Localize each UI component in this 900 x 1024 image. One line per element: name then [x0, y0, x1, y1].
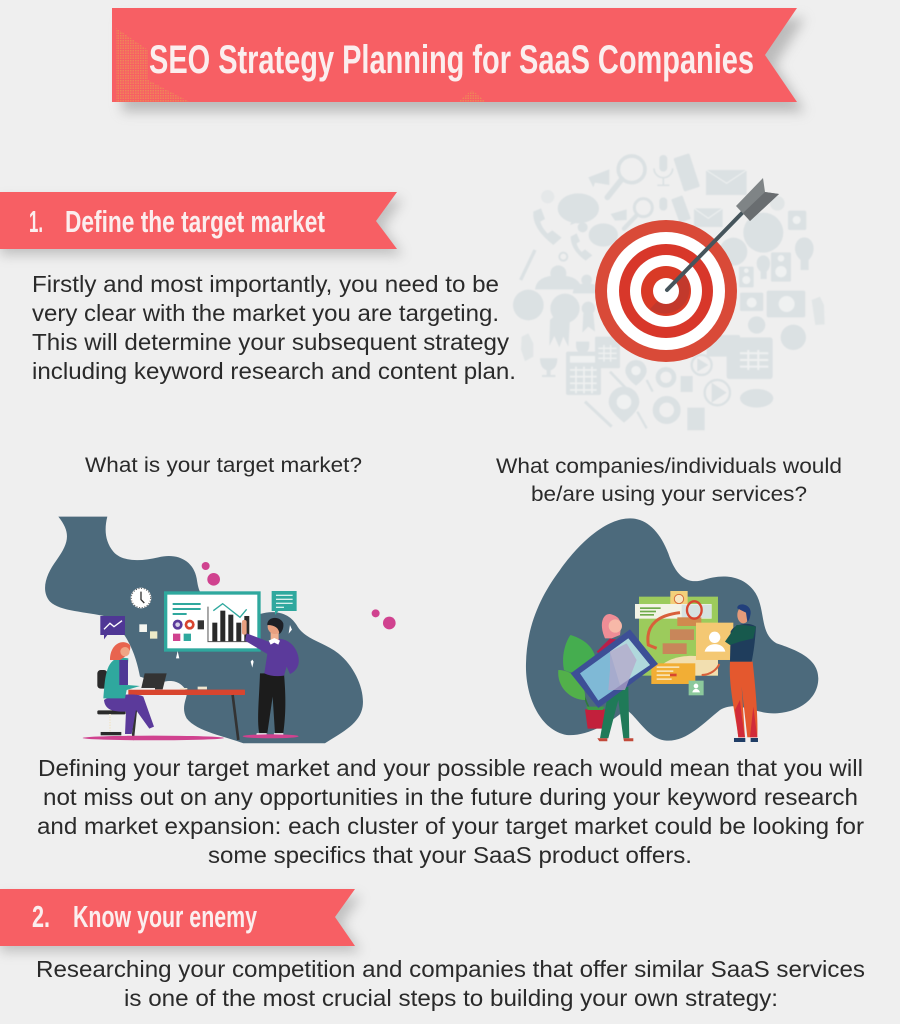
target with arrow	[595, 178, 779, 362]
section 1 closing paragraph: and market expansion: each cluster of your target market could be looking for	[37, 813, 864, 839]
section 2 intro text	[36, 956, 865, 1011]
woman holding phone	[571, 614, 658, 741]
floor shadows	[83, 734, 299, 740]
chart board	[166, 593, 259, 650]
dark blob	[45, 517, 363, 743]
target rings	[595, 220, 737, 362]
question: target market: What is your target market?	[85, 453, 362, 477]
dart arrow	[667, 178, 779, 290]
question: companies and individuals: What companies/individuals would	[496, 454, 842, 478]
question: companies and individuals	[496, 454, 842, 506]
section 1 heading: 1.	[29, 204, 43, 239]
desk	[128, 687, 245, 740]
illustration: team reviewing chart	[45, 517, 396, 743]
icon cloud behind target	[513, 153, 825, 430]
section 1 heading: Define the target market	[65, 204, 325, 239]
section 2 heading: 2.	[32, 899, 50, 934]
sticky notes	[139, 624, 157, 639]
section 1 intro text: very clear with the market you are targeting.	[32, 300, 499, 326]
tilted phone	[571, 629, 658, 708]
small green profile card	[689, 681, 704, 695]
section 1 intro text: including keyword research and content plan.	[32, 358, 516, 384]
section 1 intro text: Firstly and most importantly, you need to be	[32, 271, 499, 297]
section 1 intro text: This will determine your subsequent strategy	[32, 329, 510, 355]
clock	[131, 588, 151, 608]
question: companies and individuals: be/are using your services?	[531, 482, 807, 506]
section 1 closing paragraph: Defining your target market and your possible reach would mean that you will	[38, 755, 863, 781]
section 2 heading: Know your enemy	[73, 899, 258, 934]
section 1 ribbon	[0, 192, 403, 255]
section 1 closing paragraph: some specifics that your SaaS product offers.	[208, 842, 692, 868]
presenter man	[242, 618, 299, 738]
dark blob right	[526, 518, 818, 741]
section 1 heading	[29, 204, 325, 239]
section 1 closing paragraph: not miss out on any opportunities in the future during your keyword research	[43, 784, 858, 810]
title ribbon	[112, 8, 805, 112]
orange profile card	[696, 623, 733, 660]
plant	[558, 635, 605, 729]
orange message card	[651, 663, 695, 684]
seated woman	[97, 642, 160, 738]
illustration: phone and user profiles	[526, 518, 818, 742]
pink dots right	[372, 609, 396, 629]
icon: large magnifier	[607, 156, 645, 197]
green document panel	[635, 591, 718, 676]
section 2 heading	[32, 899, 258, 934]
section 2 ribbon	[0, 889, 361, 952]
section 2 intro text: is one of the most crucial steps to building your own strategy:	[124, 985, 778, 1011]
section 1 intro text	[32, 271, 516, 384]
thinking man	[725, 604, 758, 742]
laptop	[132, 673, 167, 690]
purple speech bubble	[100, 616, 125, 639]
section 2 intro text: Researching your competition and companies that offer similar SaaS services	[36, 956, 865, 982]
section 1 closing paragraph	[37, 755, 864, 868]
teal speech bubble	[272, 591, 297, 615]
pink dots left	[202, 562, 220, 586]
